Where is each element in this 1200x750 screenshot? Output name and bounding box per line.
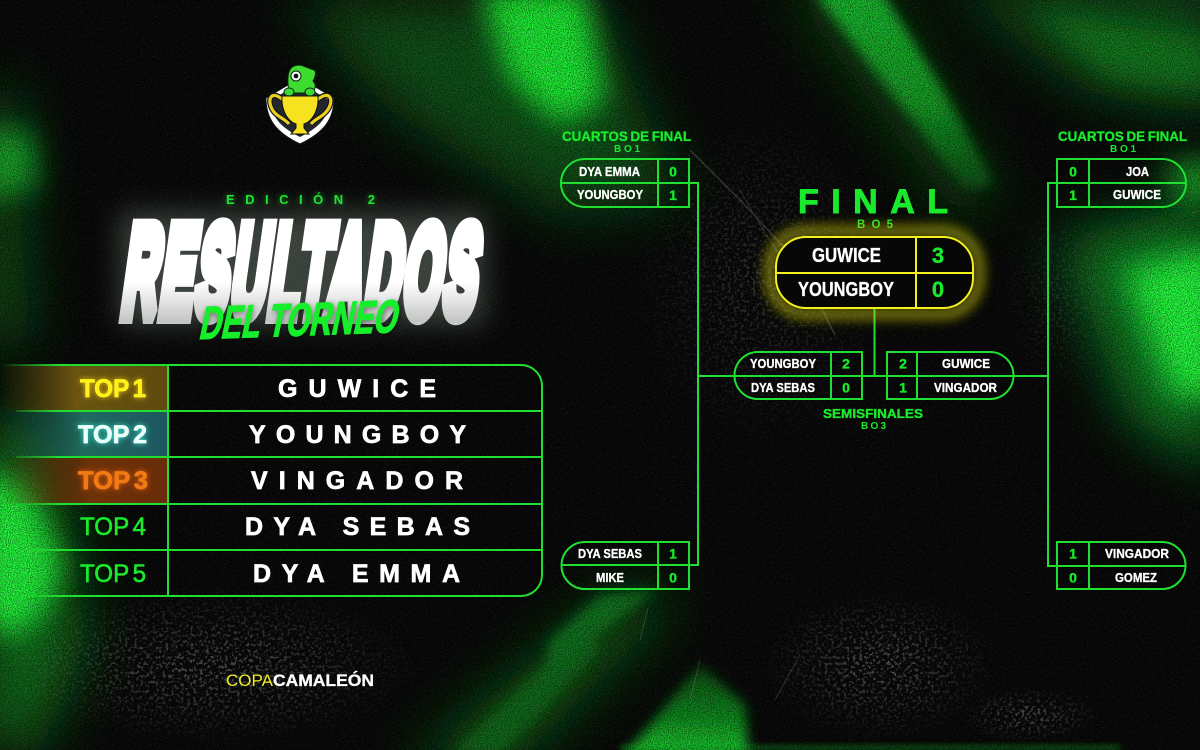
background: green spray along bottom edge	[620, 745, 1120, 750]
quarterfinal match: Joa vs Guwice: JOA	[1126, 165, 1149, 179]
row: top 4: TOP 4	[80, 513, 146, 541]
quarterfinal match: Dya Emma vs Youngboy: YOUNGBOY	[577, 188, 644, 202]
row highlight: top 3	[0, 457, 167, 504]
final heading: BO5	[857, 219, 894, 231]
background: bright green glow right edge	[1030, 10, 1200, 400]
row: top 2: YOUNGBOY	[249, 421, 466, 449]
table rules	[60, 365, 542, 596]
semifinal heading	[823, 406, 923, 432]
row highlight: top 2	[0, 411, 167, 457]
background: green streak bottom centre	[450, 590, 748, 750]
background: bright green streak top centre	[480, 0, 605, 125]
row: top 2	[78, 421, 466, 449]
title script word: DEL TORNEO	[195, 292, 406, 351]
title: RESULTADOS DEL TORNEO	[116, 200, 492, 351]
final match card: 3	[932, 243, 944, 268]
semifinal match: Youngboy vs Dya Sebas: DYA SEBAS	[751, 381, 815, 395]
bracket connector lines	[689, 183, 1057, 566]
semifinal match: Youngboy vs Dya Sebas	[734, 352, 862, 399]
row highlight: top 1	[0, 365, 167, 411]
logo frog	[284, 65, 316, 96]
quarterfinal match: Dya Sebas vs Mike: 0	[669, 570, 677, 586]
logo: frog on trophy shield	[266, 65, 334, 144]
semifinal match: Guwice vs Vingador: 1	[899, 380, 907, 396]
quarterfinal match: Joa vs Guwice: GUWICE	[1113, 188, 1161, 202]
quarterfinal match: Joa vs Guwice	[1048, 159, 1186, 207]
row: top 5	[80, 560, 460, 588]
semifinal match: Youngboy vs Dya Sebas: 2	[842, 356, 850, 372]
row: top 5: DYA EMMA	[253, 560, 460, 588]
title main word: RESULTADOS	[116, 200, 492, 342]
quarterfinal match: Vingador vs Gomez	[1048, 542, 1186, 589]
semifinal match: Guwice vs Vingador	[887, 352, 1014, 399]
edition label: EDICIÓN 2	[226, 192, 375, 207]
brand name: Copa Camaleón	[226, 671, 374, 690]
row: top 1: GUWICE	[278, 375, 436, 403]
background: scratches	[640, 150, 835, 700]
semifinal match: Guwice vs Vingador: 2	[899, 356, 907, 372]
quarterfinal match: Joa vs Guwice: 1	[1069, 187, 1077, 203]
quarterfinal match: Joa vs Guwice: 0	[1069, 164, 1077, 180]
quarterfinal match: Vingador vs Gomez: GOMEZ	[1115, 571, 1157, 585]
row: top 4: DYA SEBAS	[245, 513, 470, 541]
background: diagonal green streak top right	[812, 0, 995, 190]
quarterfinal match: Dya Sebas vs Mike: DYA SEBAS	[578, 547, 642, 561]
quarterfinal match: Dya Emma vs Youngboy: 0	[669, 164, 677, 180]
row: top 1: TOP 1	[80, 375, 146, 403]
row: top 5: TOP 5	[80, 560, 146, 588]
background: bright green glow left edge	[0, 130, 62, 640]
background: grey stone texture	[24, 146, 1100, 740]
row: top 1	[80, 375, 436, 403]
row: top 4	[80, 513, 470, 541]
brand name: Copa Camaleón: CAMALEÓN	[273, 671, 374, 690]
logo trophy	[270, 95, 331, 134]
final heading: FINAL	[798, 183, 948, 221]
semifinal match: Guwice vs Vingador: VINGADOR	[934, 381, 997, 395]
final match card: 0	[932, 277, 944, 302]
quarterfinal heading left: CUARTOS DE FINAL	[562, 129, 691, 144]
row: top 2: TOP 2	[78, 421, 147, 449]
quarterfinal match: Vingador vs Gomez: VINGADOR	[1105, 547, 1169, 561]
ranking table	[0, 365, 542, 596]
quarterfinal heading left	[562, 129, 691, 155]
quarterfinal match: Vingador vs Gomez: 0	[1069, 570, 1077, 586]
quarterfinal match: Dya Sebas vs Mike: MIKE	[596, 571, 624, 585]
quarterfinal heading right	[1058, 129, 1187, 155]
semifinal heading: BO3	[861, 421, 886, 432]
final card box	[776, 237, 973, 308]
brand name: Copa Camaleón: COPA	[226, 671, 274, 690]
final match card	[770, 231, 979, 314]
semifinal match: Youngboy vs Dya Sebas: 0	[842, 380, 850, 396]
final card glow	[770, 231, 979, 314]
final match card: GUWICE	[812, 245, 881, 267]
quarterfinal heading right: BO1	[1110, 144, 1136, 155]
title script word: DEL TORNEO	[196, 290, 405, 349]
quarterfinal match: Vingador vs Gomez: 1	[1069, 546, 1077, 562]
logo shield	[266, 85, 334, 144]
title script word	[195, 290, 406, 351]
semifinal heading: SEMISFINALES	[823, 406, 923, 421]
row: top 3: TOP 3	[78, 467, 148, 495]
quarterfinal match: Dya Emma vs Youngboy: 1	[669, 187, 677, 203]
semifinal match: Guwice vs Vingador: GUWICE	[942, 357, 990, 371]
row: top 3	[78, 467, 463, 495]
quarterfinal match: Dya Sebas vs Mike: 1	[669, 546, 677, 562]
quarterfinal match: Dya Emma vs Youngboy	[561, 159, 689, 207]
quarterfinal match: Dya Sebas vs Mike	[561, 542, 689, 589]
row: top 3: VINGADOR	[251, 467, 463, 495]
final match card: YOUNGBOY	[798, 279, 895, 301]
semifinal match: Youngboy vs Dya Sebas: YOUNGBOY	[750, 357, 817, 371]
quarterfinal heading right: CUARTOS DE FINAL	[1058, 129, 1187, 144]
title halo	[120, 212, 485, 324]
quarterfinal match: Dya Emma vs Youngboy: DYA EMMA	[579, 165, 640, 179]
quarterfinal heading left: BO1	[614, 144, 640, 155]
